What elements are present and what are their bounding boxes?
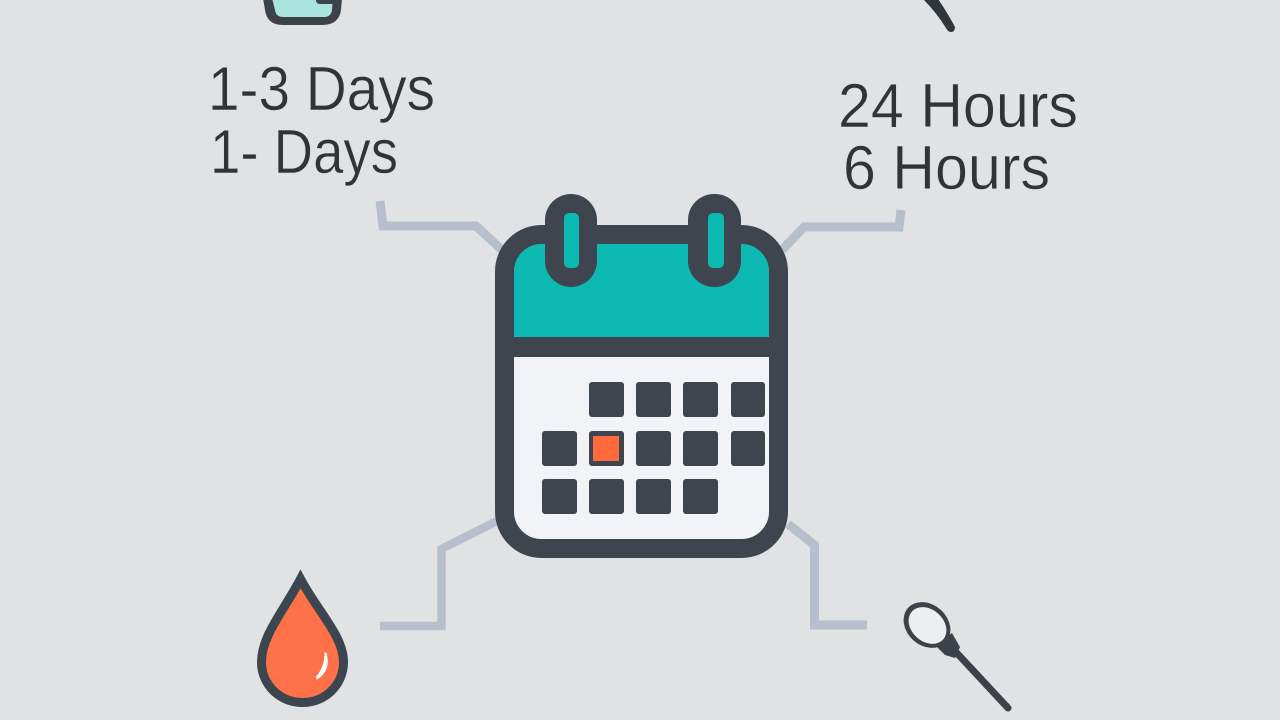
date grid bbox=[542, 382, 765, 514]
drop body bbox=[262, 579, 344, 702]
connector: bottom right bbox=[788, 524, 867, 625]
icon: spoon bbox=[894, 593, 1008, 708]
connector: top right bbox=[782, 210, 901, 250]
text block: hours bbox=[838, 72, 1078, 203]
icon: calendar bbox=[504, 194, 779, 548]
right binder ring bbox=[688, 194, 741, 287]
label: 24 Hours: 24 Hours bbox=[838, 72, 1078, 141]
spoon bowl bbox=[894, 593, 960, 657]
spoon neck bbox=[935, 633, 960, 658]
label: 6 Hours: 6 Hours bbox=[843, 134, 1050, 203]
calendar outline bbox=[504, 234, 778, 548]
label: 1-3 Days: 1-3 Days bbox=[208, 55, 435, 124]
drop highlight bbox=[317, 653, 327, 679]
calendar header bbox=[514, 244, 769, 347]
header divider bbox=[504, 337, 779, 357]
icon: blood drop bbox=[262, 579, 344, 702]
icon: cup cropped at top bbox=[263, 0, 342, 25]
left binder ring bbox=[545, 194, 597, 287]
label: 1- Days: 1- Days bbox=[210, 118, 398, 187]
spoon bowl inner bbox=[901, 600, 954, 651]
connector: top left bbox=[380, 201, 502, 250]
text block: days bbox=[208, 55, 435, 187]
icon: spoon handle cropped at top bbox=[923, 0, 955, 32]
calendar page bbox=[504, 234, 778, 548]
connector: bottom left bbox=[380, 521, 497, 626]
spoon handle bbox=[955, 651, 1008, 708]
highlighted date bbox=[593, 436, 619, 461]
